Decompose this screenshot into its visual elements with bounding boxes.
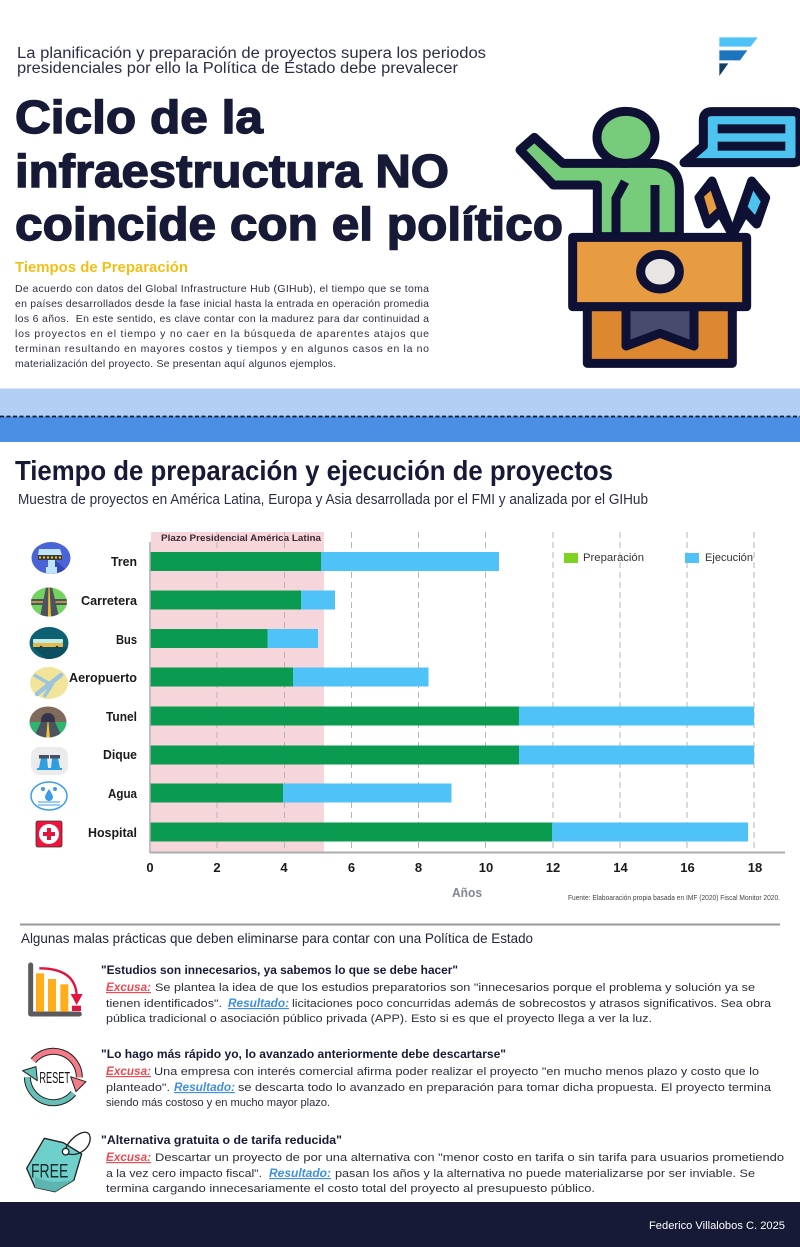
x axis labels: 4 [280, 860, 288, 875]
title [15, 91, 563, 250]
x axis labels: 6 [348, 860, 355, 875]
practice 2: Resultado: [174, 1082, 235, 1094]
category labels: Agua [108, 786, 138, 801]
x axis labels: 10 [479, 860, 493, 875]
practice 3: a la vez cero impacto fiscal". [106, 1168, 262, 1180]
category labels: Aeropuerto [69, 670, 137, 685]
x axis labels: 14 [613, 860, 628, 875]
x axis labels: 12 [546, 860, 560, 875]
icon: reset: RESET [39, 1070, 70, 1087]
text block: description [15, 283, 429, 370]
text block: description: De acuerdo con datos del Global Infrastructure Hub (GIHub), el tiempo que se toma [15, 283, 429, 295]
practice 2: se descarta todo lo avanzado en preparación para tomar dicha propuesta. El proyecto termina [238, 1082, 772, 1094]
category labels: Tren [111, 554, 137, 569]
text block: description: terminan resultando en mayores costos y tiempos y en algunos casos en la no [15, 343, 429, 355]
practice 3: "Alternativa gratuita o de tarifa reducida" [101, 1135, 342, 1147]
icon: reset [23, 1051, 86, 1103]
bar: agua [150, 784, 452, 802]
category labels: Bus [116, 632, 137, 647]
practice 3 [101, 1135, 784, 1195]
practice 1: Se plantea la idea de que los estudios preparatorios son "innecesarios porque el problema y solución ya se [155, 982, 755, 994]
icon: train [31, 542, 72, 575]
bar: tren [150, 552, 499, 571]
title: Ciclo de la [15, 91, 263, 143]
practice 2: Una empresa con interés comercial afirma poder realizar el proyecto "en mucho menos plazo y costo que lo [154, 1066, 759, 1078]
practice 1: licitaciones poco concurridas además de sobrecostos y atrasos significativos. Sea obra [292, 998, 772, 1010]
practice 2: planteado". [106, 1082, 170, 1094]
category labels [69, 554, 138, 840]
practice 2: "Lo hago más rápido yo, lo avanzado anteriormente debe descartarse" [101, 1049, 506, 1061]
bar chart: project times [69, 532, 785, 900]
bar: hospital [150, 822, 748, 842]
category labels: Carretera [81, 593, 138, 608]
text block: description: los proyectos en el tiempo y no caer en la búsqueda de aparentes atajos que [15, 328, 429, 340]
x axis labels: 16 [680, 860, 695, 875]
section heading: tiempos de preparacion: Tiempos de Preparación [15, 260, 188, 276]
bar: carretera [150, 590, 335, 610]
source note: Fuente: Elaboaración propia basada en IMF (2020) Fiscal Monitor 2020. [568, 895, 780, 902]
icon: free tag: FREE [31, 1161, 68, 1183]
section heading: malas practicas: Algunas malas prácticas que deben eliminarse para contar con una Política de Estado [21, 930, 533, 946]
icon: hospital [36, 821, 62, 847]
practice 1: tienen identificados". [106, 998, 222, 1010]
icon: free tag [27, 1132, 90, 1192]
practice 1: Excusa: [106, 982, 151, 994]
bar: tunel [150, 706, 754, 726]
bar: aeropuerto [150, 668, 428, 686]
practice 1: "Estudios son innecesarios, ya sabemos lo que se debe hacer" [101, 965, 458, 977]
x axis labels: 18 [748, 860, 762, 875]
chart subtitle: Muestra de proyectos en América Latina, Europa y Asia desarrollada por el FMI y analizada por el GIHub [18, 492, 648, 508]
title: infraestructura NO [15, 145, 449, 197]
practice 2 [101, 1049, 772, 1109]
icon: logo [719, 37, 758, 76]
icon: dam [31, 747, 68, 775]
text block: description: en países desarrollados desde la fase inicial hasta la entrada en operación promedia [15, 298, 429, 310]
text block: description: los 6 años. En este sentido, es clave contar con la madurez para dar continuidad a [15, 313, 429, 325]
bar: bus [150, 629, 318, 648]
category labels: Hospital [88, 825, 137, 840]
icon: water [31, 782, 67, 810]
subtitle: intro statement: La planificación y preparación de proyectos supera los periodos [17, 45, 486, 62]
x axis labels: 8 [415, 860, 422, 875]
icon: falling chart [31, 965, 83, 1014]
band: presidential term: Plazo Presidencial América Latina [161, 533, 322, 544]
x axis labels: 0 [146, 860, 154, 875]
practice 2: siendo más costoso y en mucho mayor plazo. [106, 1097, 330, 1109]
footer: Federico Villalobos C. 2025 [649, 1220, 785, 1232]
practice 1 [101, 965, 772, 1025]
category labels: Tunel [106, 709, 137, 724]
footer [0, 1202, 800, 1247]
icon: tunnel [29, 706, 67, 739]
band: presidential term [151, 532, 324, 852]
practice 1: pública tradicional o asociación público privada (APP). Esto si es que el proyecto llega a ver la luz. [106, 1013, 652, 1025]
legend: Preparación [583, 552, 644, 564]
text block: description: materialización del proyecto. Se presentan aquí algunos ejemplos. [15, 358, 336, 370]
x axis labels [146, 860, 762, 875]
legend: Ejecución [705, 552, 753, 564]
icon: airplane [30, 667, 68, 699]
x axis labels: 2 [213, 860, 221, 875]
practice 3: Excusa: [106, 1152, 151, 1164]
icon: road [30, 587, 68, 617]
practice 3: Descartar un proyecto de por una alternativa con "menor costo en tarifa o sin tarifa para usuarios prometiendo [155, 1152, 784, 1164]
axis title: Años [452, 885, 482, 900]
bar: dique [150, 746, 754, 764]
chart heading: Tiempo de preparación y ejecución de proyectos [15, 455, 613, 486]
practice 3: pasan los años y la alternativa no puede materializarse por ser inviable. Se [335, 1168, 755, 1180]
band: separator [0, 388, 800, 442]
category labels: Dique [103, 747, 137, 762]
title: coincide con el político [15, 198, 563, 250]
icon: bus [29, 627, 70, 660]
practice 1: Resultado: [228, 998, 289, 1010]
practice 3: termina cargando innecesariamente el costo total del proyecto al presupuesto público. [106, 1183, 595, 1195]
practice 3: Resultado: [269, 1168, 331, 1180]
subtitle: intro statement [17, 45, 486, 77]
legend [564, 552, 753, 564]
icon: politician at podium [520, 111, 800, 363]
practice 2: Excusa: [106, 1066, 151, 1078]
subtitle: intro statement: presidenciales por ello la Política de Estado debe prevalecer [17, 60, 458, 77]
